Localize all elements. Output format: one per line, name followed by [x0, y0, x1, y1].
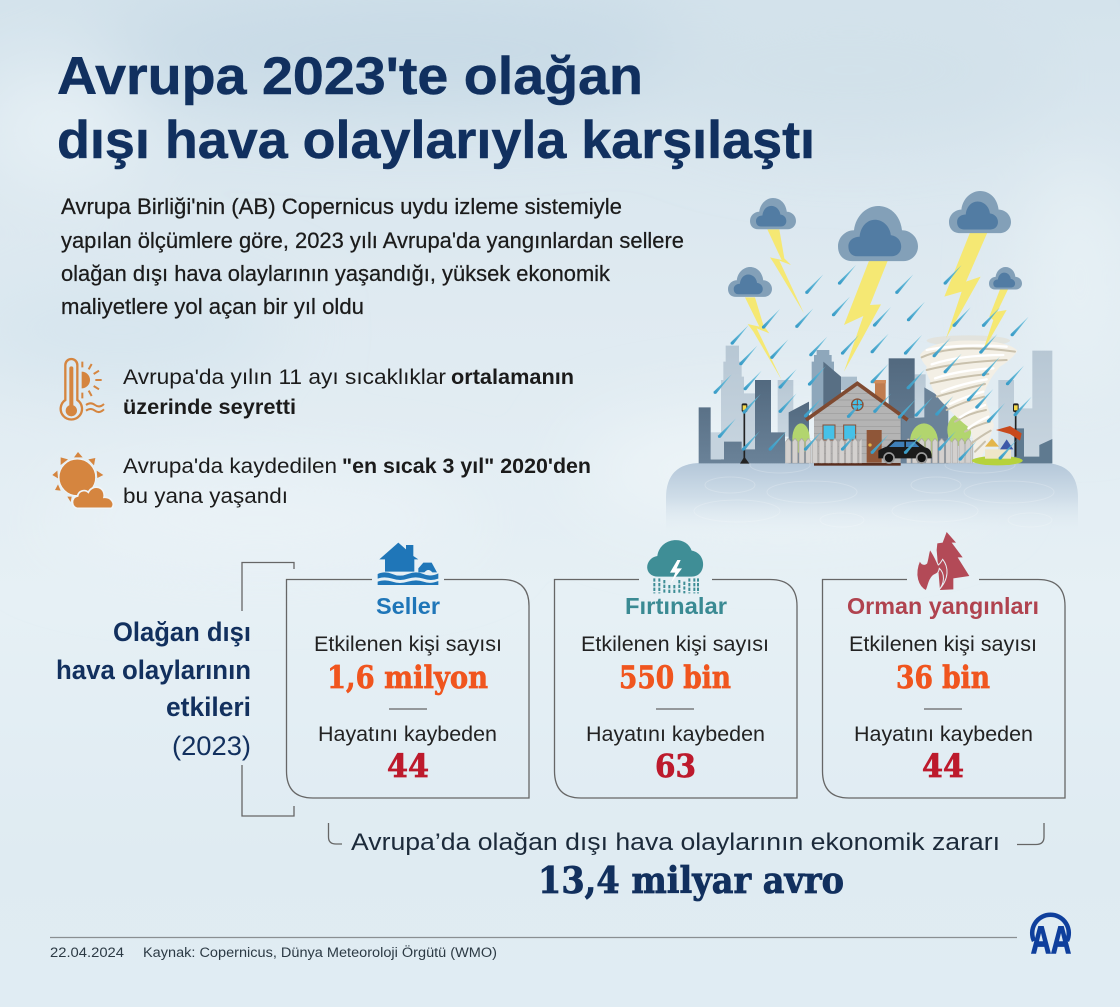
- text: temperature fact: Avrupa'da yılın 11 ayı sıcaklıklar: [123, 365, 446, 389]
- car: [878, 440, 932, 463]
- AA logo: AA: [1031, 920, 1071, 962]
- icon: sun and cloud: [52, 452, 113, 508]
- section heading: impacts: (2023): [172, 731, 251, 761]
- fire label: Orman yangınları: [847, 593, 1039, 619]
- section heading: impacts: Olağan dışı: [113, 617, 251, 647]
- intro paragraph: olağan dışı hava olaylarının yaşandığı, yüksek ekonomik: [61, 261, 611, 286]
- text: hottest years fact: "en sıcak 3 yıl" 2020'den: [342, 454, 591, 478]
- economic loss label: Avrupa’da olağan dışı hava olaylarının ekonomik zararı: [351, 829, 1000, 856]
- affected label: Etkilenen kişi sayısı: [581, 632, 769, 656]
- affected label: Etkilenen kişi sayısı: [849, 632, 1037, 656]
- affected label: Etkilenen kişi sayısı: [314, 632, 502, 656]
- panel: forest fires: [822, 532, 1065, 798]
- footer: 22.04.2024: [50, 945, 125, 960]
- intro paragraph: maliyetlere yol açan bir yıl oldu: [61, 294, 364, 319]
- small house and flying roof: [972, 426, 1023, 465]
- storm clouds: [728, 191, 1022, 297]
- section heading: impacts: [56, 617, 251, 761]
- house: [806, 380, 908, 466]
- street lamps: [740, 403, 1019, 464]
- left bracket: [242, 562, 294, 816]
- flooded platform: [666, 457, 1078, 535]
- text: hottest years fact: [123, 454, 591, 508]
- deaths label: Hayatını kaybeden: [586, 722, 765, 746]
- storm label: Fırtınalar: [625, 593, 727, 619]
- deaths value: 44: [922, 747, 964, 785]
- title: [57, 47, 815, 170]
- panel: floods: [286, 543, 529, 798]
- text: hottest years fact: Avrupa'da kaydedilen: [123, 454, 337, 478]
- intro paragraph: Avrupa Birliği'nin (AB) Copernicus uydu izleme sistemiyle: [61, 194, 622, 219]
- tornado: [920, 335, 1017, 457]
- illustration: storm over city: [666, 191, 1078, 535]
- text: temperature fact: [123, 365, 574, 419]
- lightning bolts: [745, 229, 1008, 380]
- flood label: Seller: [376, 593, 440, 619]
- panel: storms: [554, 540, 797, 798]
- rain: [714, 265, 1032, 461]
- picket fence: [785, 438, 973, 463]
- economic loss value: 13,4 milyar avro: [538, 860, 844, 902]
- title: Avrupa 2023'te olağan: [57, 47, 643, 106]
- bottom bracket: [328, 823, 1044, 844]
- deaths value: 44: [387, 747, 429, 785]
- footer: [50, 938, 1017, 960]
- affected value: 550 bin: [619, 660, 731, 696]
- affected value: 36 bin: [896, 660, 990, 696]
- text: temperature fact: üzerinde seyretti: [123, 395, 296, 419]
- section heading: impacts: etkileri: [166, 692, 251, 722]
- text: hottest years fact: bu yana yaşandı: [123, 484, 288, 508]
- deaths value: 63: [655, 747, 696, 785]
- AA logo: [1031, 915, 1071, 962]
- icon: thermometer and sun: [61, 359, 104, 419]
- text: temperature fact: ortalamanın: [451, 365, 574, 389]
- intro paragraph: [61, 194, 684, 319]
- affected value: 1,6 milyon: [327, 660, 488, 696]
- deaths label: Hayatını kaybeden: [318, 722, 497, 746]
- section heading: impacts: hava olaylarının: [56, 655, 251, 685]
- icon: tree and flame: [917, 532, 969, 591]
- intro paragraph: yapılan ölçümlere göre, 2023 yılı Avrupa'da yangınlardan sellere: [61, 228, 684, 253]
- footer: Kaynak: Copernicus, Dünya Meteoroloji Örgütü (WMO): [143, 945, 497, 960]
- icon: storm cloud: [647, 540, 703, 593]
- icon: flooded house: [378, 543, 438, 585]
- deaths label: Hayatını kaybeden: [854, 722, 1033, 746]
- title: dışı hava olaylarıyla karşılaştı: [57, 111, 815, 170]
- trees: [792, 414, 971, 460]
- city skyline: [699, 346, 1052, 463]
